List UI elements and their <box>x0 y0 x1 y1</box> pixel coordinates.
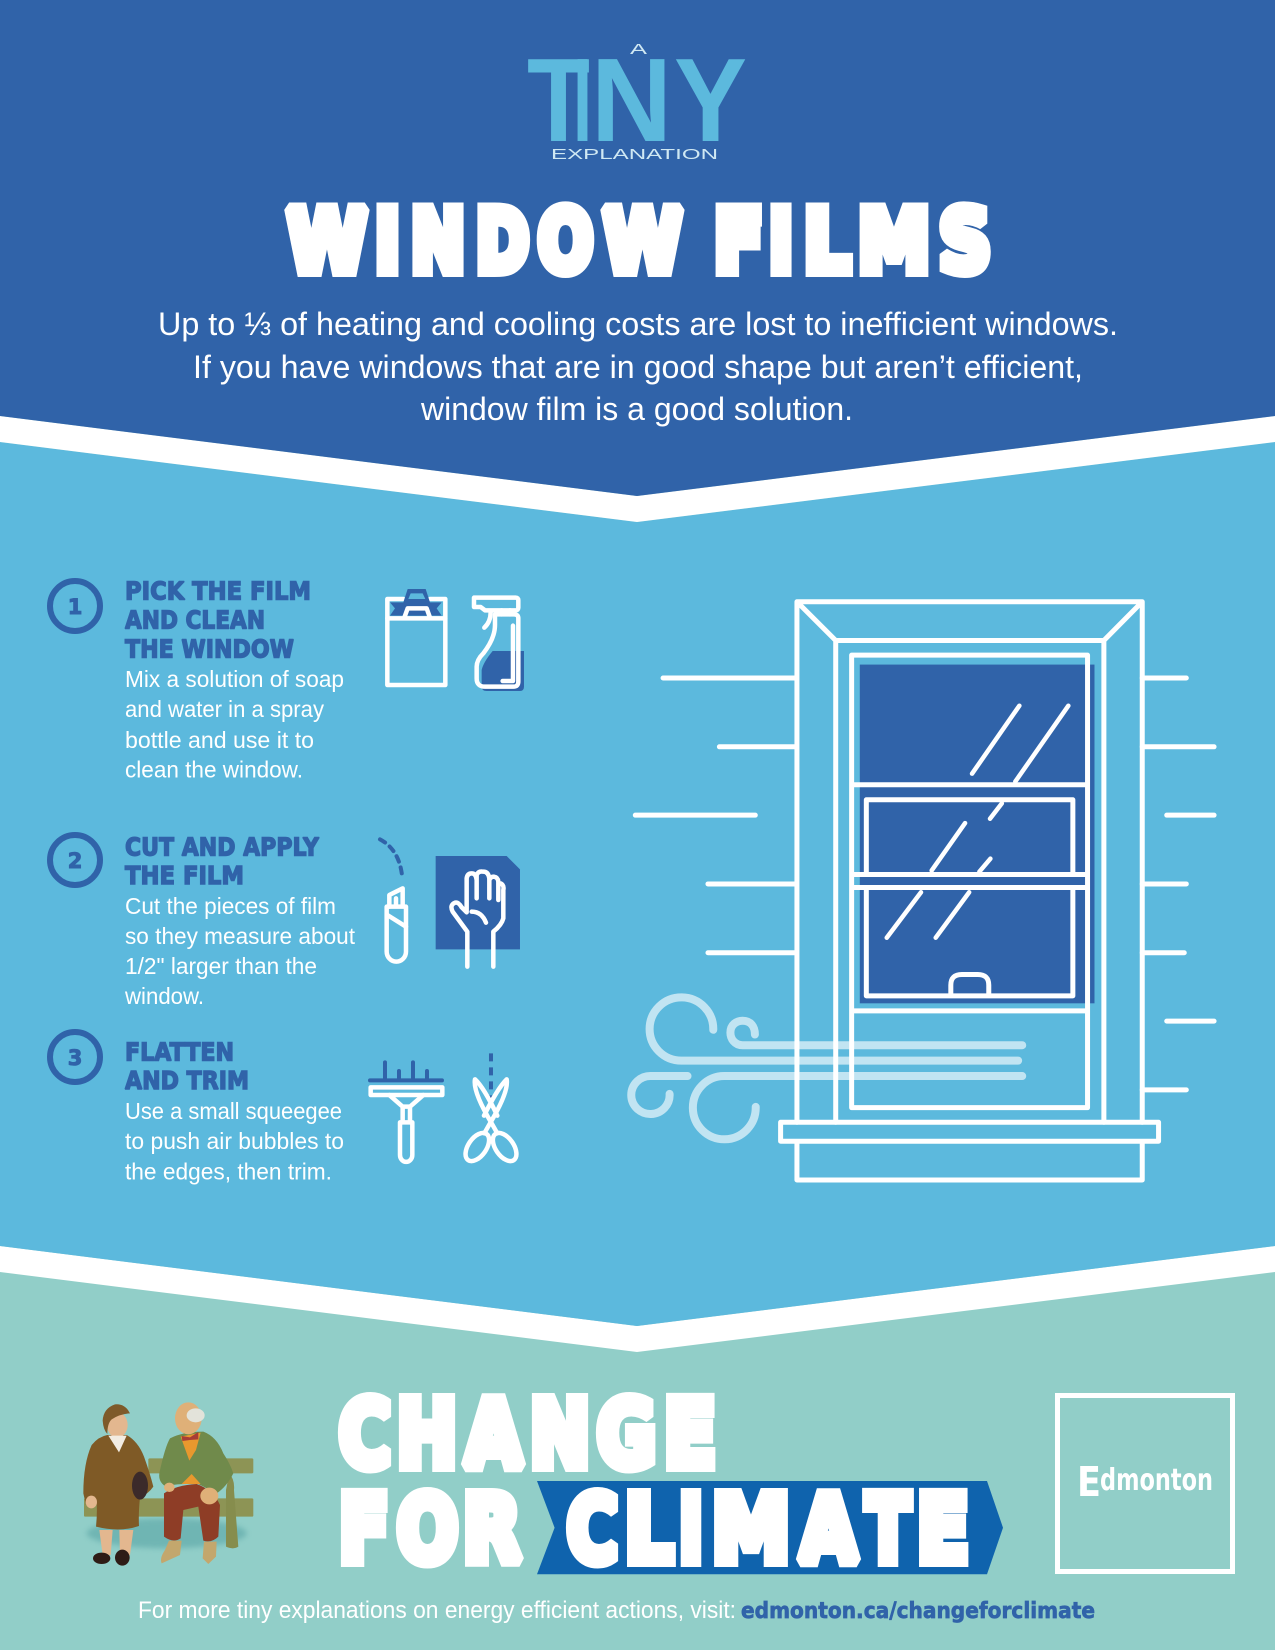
icon: utility knife <box>380 839 406 962</box>
window sash and rails <box>852 655 1088 1108</box>
footer call to action <box>138 1597 1095 1624</box>
City of Edmonton logo box <box>1058 1396 1232 1572</box>
background: dark blue header band <box>0 0 1275 496</box>
logo word: A: A <box>630 41 647 58</box>
word: CLIMATE: A <box>800 1476 857 1583</box>
background: cyan steps band <box>0 442 1275 1326</box>
icon: hand on film <box>436 856 520 967</box>
footer call to action: For more tiny explanations on energy efficient actions, visit: <box>138 1597 736 1624</box>
title: Window Films: N <box>411 192 465 292</box>
icon: film package <box>387 589 445 685</box>
blue arrow banner <box>537 1481 1003 1574</box>
window sill <box>781 1122 1159 1180</box>
title: Window Films: D <box>476 192 529 292</box>
word: CLIMATE: C <box>567 1476 618 1583</box>
step 3 heading: AND TRIM <box>125 1066 249 1095</box>
word: FOR: F <box>339 1476 389 1583</box>
step 1 number badge <box>50 581 100 631</box>
lower white chevron divider <box>0 1246 1275 1352</box>
step 1 body: and water in a spray <box>125 696 324 722</box>
step 2 number badge <box>50 835 100 885</box>
icon: scissors <box>461 1053 521 1165</box>
intro text: window film is a good solution. <box>420 391 853 427</box>
step 2 heading: THE FILM <box>125 861 244 890</box>
intro text: Up to ⅓ of heating and cooling costs are lost to inefficient windows. <box>158 306 1118 342</box>
step 3 body: Use a small squeegee <box>125 1098 342 1124</box>
word: CHANGE: C <box>339 1381 391 1488</box>
word: CHANGE: G <box>597 1381 656 1488</box>
title: Window Films: W <box>603 192 682 292</box>
icon: squeegee <box>370 1062 442 1162</box>
step 2 heading: CUT AND APPLY <box>125 832 320 862</box>
step 1 <box>50 576 524 782</box>
logo wordmark: dmonton <box>1100 1463 1213 1498</box>
title: Window Films: F <box>714 192 763 292</box>
title: Window Films: W <box>287 192 367 292</box>
step 3 <box>50 1032 521 1184</box>
step 3 number badge: 3 <box>68 1046 82 1070</box>
photo: miniature couple on a bench <box>83 1402 253 1566</box>
step 1 body: bottle and use it to <box>125 727 314 753</box>
word: CHANGE: A <box>465 1381 522 1488</box>
step 2 body: so they measure about <box>125 923 356 949</box>
step 1 body: clean the window. <box>125 756 303 782</box>
title: Window Films: L <box>804 192 850 292</box>
upper white chevron divider <box>0 416 1275 522</box>
Change for Climate lockup <box>339 1381 1003 1583</box>
step 1 heading: AND CLEAN <box>125 606 265 634</box>
step 1 heading: PICK THE FILM <box>125 576 311 606</box>
glass reflections <box>887 706 1068 938</box>
intro text <box>158 306 1118 427</box>
step 2 body: window. <box>124 983 204 1009</box>
word: CLIMATE: E <box>917 1476 969 1583</box>
logo word: TINY: I <box>573 34 592 167</box>
title: Window Films: S <box>939 192 991 292</box>
word: CLIMATE: M <box>712 1476 790 1583</box>
word: CHANGE: E <box>664 1381 716 1488</box>
logo wordmark: E <box>1077 1458 1101 1506</box>
intro text: If you have windows that are in good shape but aren’t efficient, <box>193 349 1083 385</box>
word: CLIMATE: T <box>866 1476 910 1583</box>
window frame <box>797 602 1142 1122</box>
step 3 body: to push air bubbles to <box>125 1128 344 1154</box>
word: FOR: R <box>463 1476 521 1583</box>
word: CLIMATE: I <box>679 1476 703 1583</box>
logo: A Tiny Explanation <box>527 34 747 167</box>
logo word: TINY: T <box>527 34 590 167</box>
step 2 <box>50 832 520 1009</box>
step 2 body: Cut the pieces of film <box>125 893 336 919</box>
step 1 body: Mix a solution of soap <box>125 666 344 692</box>
window illustration <box>631 602 1214 1180</box>
title: Window Films: O <box>538 192 593 292</box>
logo word: TINY: Y <box>674 34 747 167</box>
lower pane and handle <box>866 800 1073 996</box>
step 3 number badge <box>50 1032 100 1082</box>
side motion lines <box>635 678 1214 1090</box>
word: CHANGE: H <box>397 1381 457 1488</box>
step 2 body: 1/2" larger than the <box>125 953 317 979</box>
title: Window Films: I <box>375 192 400 292</box>
word: CHANGE: N <box>530 1381 590 1488</box>
icon: spray bottle <box>474 598 524 691</box>
logo word: EXPLANATION: EXPLANATION <box>551 146 718 163</box>
title: Window Films: M <box>858 192 930 292</box>
logo word: TINY: N <box>591 34 672 167</box>
step 3 heading: FLATTEN <box>125 1038 234 1066</box>
step 3 body: the edges, then trim. <box>125 1158 332 1184</box>
word: FOR: O <box>397 1476 458 1583</box>
website link: edmonton.ca/changeforclimate <box>741 1599 1095 1624</box>
window glass film <box>860 665 1094 1003</box>
wind gust <box>631 997 1022 1139</box>
step 1 number badge: 1 <box>68 595 82 619</box>
word: CLIMATE: L <box>625 1476 673 1583</box>
step 2 number badge: 2 <box>68 849 82 873</box>
title: Window Films: I <box>769 192 793 292</box>
step 1 heading: THE WINDOW <box>125 634 294 664</box>
